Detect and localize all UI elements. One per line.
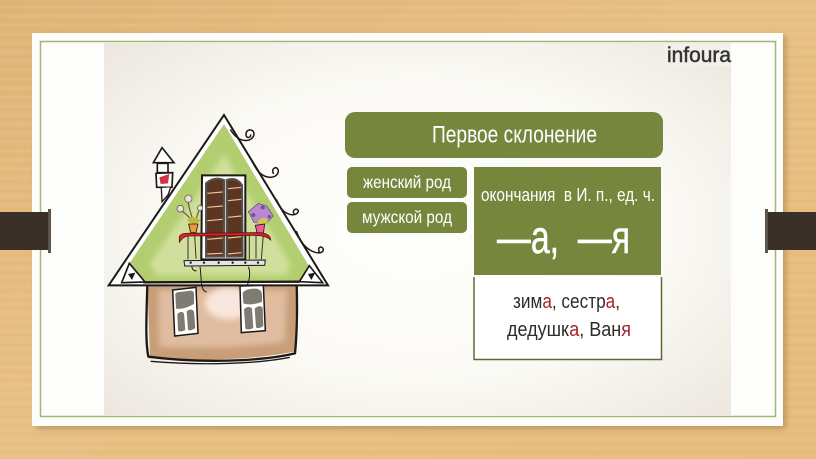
chimney bbox=[153, 148, 174, 202]
heading bar: Первое склонение: Первое склонение bbox=[432, 122, 597, 148]
endings large text: —а, —я bbox=[497, 211, 630, 263]
gable roof bbox=[109, 115, 328, 285]
panel: endings bbox=[474, 167, 661, 275]
example words line 2: дедушка, Ваня bbox=[507, 319, 631, 341]
example words line 1: зима, сестра, bbox=[513, 291, 620, 313]
label: мужской род: мужской род bbox=[362, 207, 452, 227]
label: женский род: женский род bbox=[363, 172, 451, 192]
wall window right bbox=[240, 285, 265, 333]
left tab bbox=[0, 209, 51, 253]
video panel background bbox=[104, 43, 731, 416]
roof curls bbox=[231, 130, 323, 253]
right flower pot bbox=[248, 203, 273, 234]
left flower pot bbox=[177, 195, 203, 233]
wall window left bbox=[173, 287, 198, 336]
label: мужской род bbox=[347, 202, 467, 233]
balcony railing bbox=[179, 233, 271, 292]
logo: infoura: infoura bbox=[667, 44, 731, 67]
right tab bbox=[765, 209, 816, 253]
slide card bbox=[32, 33, 786, 429]
house illustration bbox=[109, 115, 328, 364]
house wall bbox=[146, 282, 297, 364]
panel: examples bbox=[474, 277, 662, 360]
label: женский род bbox=[347, 167, 467, 198]
heading bar: Первое склонение bbox=[345, 112, 663, 158]
endings caption: окончания в И. п., ед. ч. bbox=[481, 185, 655, 205]
balcony door bbox=[201, 175, 245, 259]
